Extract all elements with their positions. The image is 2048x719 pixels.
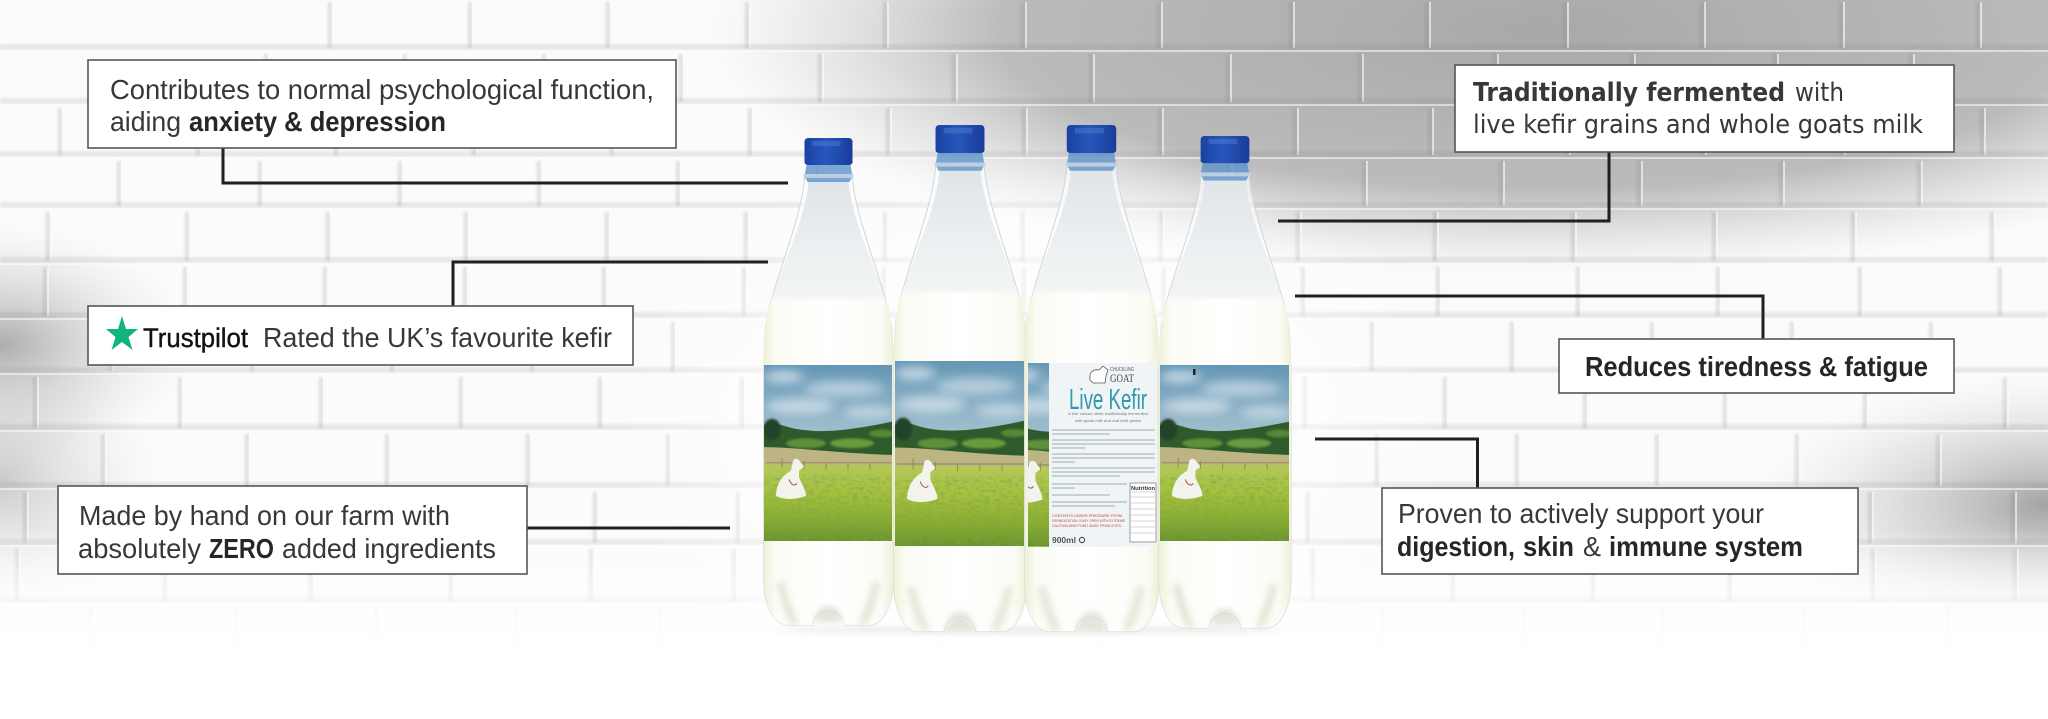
bottle 3 label panel: with goats milk and real kefir grains [1075,418,1141,423]
callout: digestion, skin and immune system: Proven to actively support your [1398,498,1764,529]
callout: Trustpilot rating: Trustpilot [143,323,248,353]
connector lines [223,148,1763,528]
bottle 2 [894,125,1027,631]
callout: traditionally fermented [1455,65,1954,152]
callout: digestion, skin and immune system: digestion, [1397,531,1515,562]
bottle 1 label [763,365,895,541]
bottle 1 [763,138,895,625]
callout: made by hand: absolutely [78,533,201,564]
callout: digestion, skin and immune system: immune system [1609,531,1803,562]
nutrition panel [1130,483,1156,542]
warning text [1052,514,1126,528]
logo: goat outline [1090,366,1108,383]
bottle 4 [1159,136,1292,628]
bottle 3 label picture strip [1028,363,1049,547]
callout: Trustpilot rating: Rated the UK’s favourite kefir [263,322,612,353]
callout: Trustpilot rating [88,306,633,365]
callout: psychological function: anxiety & depression [189,106,446,137]
callout: psychological function: Contributes to normal psychological function, [110,74,654,105]
nutrition panel: Nutrition [1131,486,1155,492]
bottle 3 label panel: GOAT [1110,371,1135,385]
callout: psychological function [88,60,676,148]
callout: traditionally fermented: live kefir grains and whole goats milk [1473,110,1923,140]
bottle 2 label [894,361,1027,546]
warning text: CAUTION AND POINT AWAY FROM EYES. [1052,524,1122,528]
callout: psychological function: aiding [110,106,181,137]
warning text: FERMENTATION. EASY OPEN WITH EXTREME [1052,519,1126,523]
callout: digestion, skin and immune system: skin [1523,531,1574,562]
warning text: CONTENTS UNDER PRESSURE FROM [1052,514,1122,518]
recycle icon [1079,537,1085,543]
product name: Live Kefir [1069,384,1147,416]
bottle 3 label panel [1049,363,1157,547]
callout: made by hand: ZERO [209,533,274,564]
bottle 4 label [1159,365,1292,541]
callout: made by hand: added ingredients [282,533,496,564]
callout: made by hand: Made by hand on our farm with [79,500,450,531]
bottle 3 [1024,125,1159,632]
product description: A live culture drink traditionally fermented [1068,411,1148,416]
body copy lines [1052,430,1155,506]
logo: wordmark: CHUCKLING [1110,367,1134,373]
callout: digestion, skin and immune system: & [1583,531,1601,562]
callout: made by hand [58,486,527,574]
icon: Trustpilot star [106,316,138,350]
volume: 900ml [1052,536,1076,545]
callout: tiredness and fatigue [1559,339,1954,393]
callout: tiredness and fatigue: Reduces tiredness & fatigue [1585,351,1928,382]
ground shadow under bottles [775,626,1285,634]
callout: traditionally fermented: Traditionally fermented [1473,78,1785,108]
callout: digestion, skin and immune system [1382,488,1858,574]
callout: traditionally fermented: with [1795,78,1844,108]
